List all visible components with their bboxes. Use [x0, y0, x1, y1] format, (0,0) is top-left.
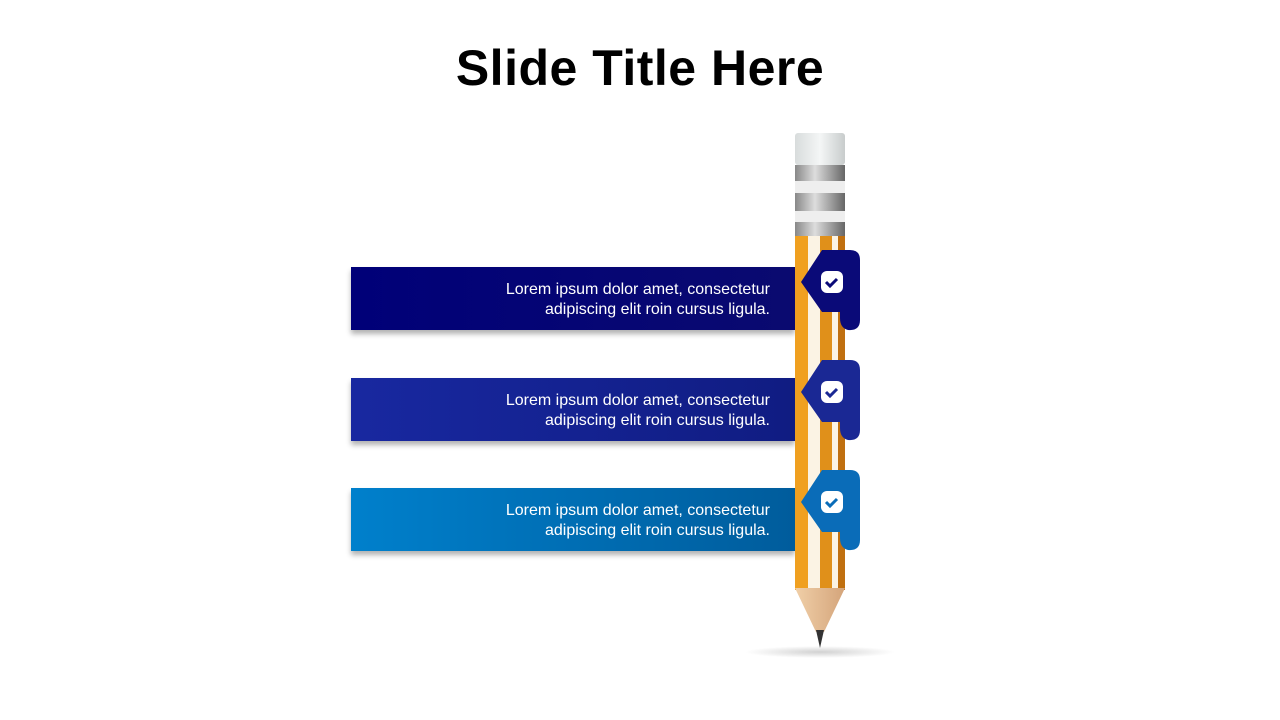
bar 3: Lorem ipsum dolor amet, consectetur	[506, 502, 770, 519]
bar 1	[351, 267, 795, 330]
title: Slide Title Here	[456, 40, 824, 96]
tag 3	[801, 470, 860, 550]
bar 2: Lorem ipsum dolor amet, consectetur	[506, 392, 770, 409]
bar 2	[351, 378, 795, 441]
bar 3	[351, 488, 795, 551]
bar 1: adipiscing elit roin cursus ligula.	[545, 300, 770, 318]
bar 3: adipiscing elit roin cursus ligula.	[545, 522, 770, 538]
tag 2	[801, 360, 860, 440]
tag 1	[801, 250, 860, 330]
bar 2: adipiscing elit roin cursus ligula.	[545, 412, 770, 428]
bar 1: Lorem ipsum dolor amet, consectetur	[506, 281, 770, 298]
